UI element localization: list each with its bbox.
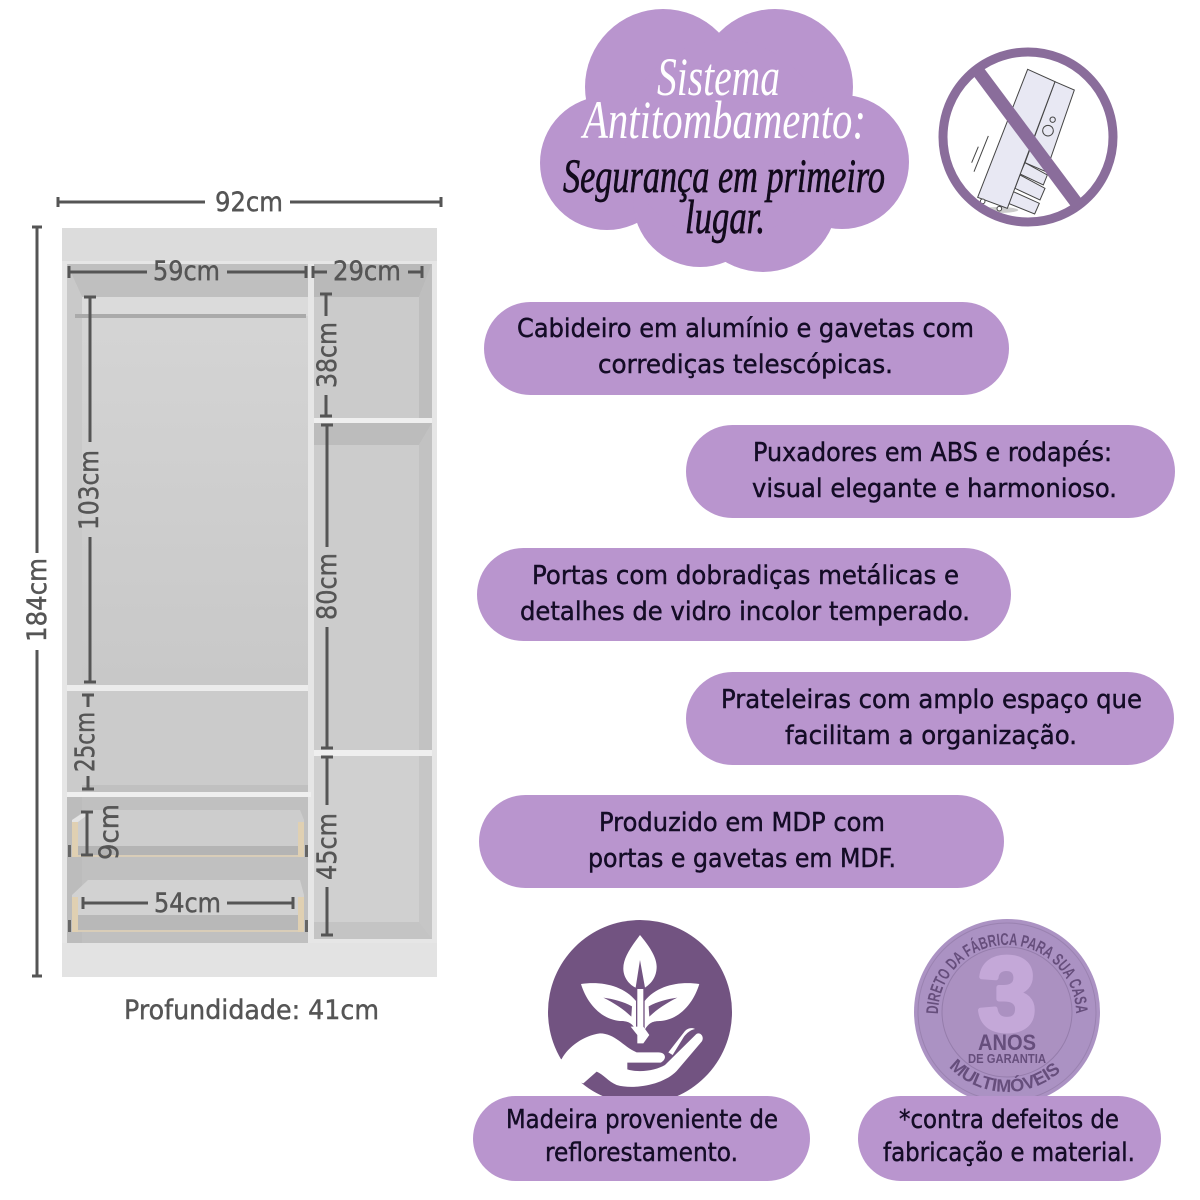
warranty seal: 3	[978, 937, 1036, 1053]
dimension: 59cm: 59cm	[153, 256, 220, 287]
dimension: 54cm	[83, 888, 293, 919]
icon: plant in hand	[543, 920, 732, 1104]
feature pill: cabideiro: Cabideiro em alumínio e gavetas com	[517, 314, 974, 344]
feature pill: MDP: Produzido em MDP com	[599, 808, 885, 838]
dimension: 80cm: 80cm	[312, 553, 343, 620]
warranty seal: DIRETO DA FÁBRICA PARA SUA CASA	[926, 933, 1088, 1014]
dimension: width 92cm	[58, 187, 441, 218]
feature pill: portas: Portas com dobradiças metálicas e	[532, 561, 959, 591]
dimension: 9cm: 9cm	[94, 804, 125, 860]
feature pill: reflorestamento: Madeira proveniente de	[506, 1105, 778, 1135]
feature pill: puxadores	[686, 425, 1175, 518]
feature pill: cabideiro	[484, 302, 1009, 395]
feature pill: cabideiro: corrediças telescópicas.	[598, 350, 893, 380]
feature pill: puxadores: Puxadores em ABS e rodapés:	[753, 438, 1112, 468]
wardrobe diagram	[62, 228, 437, 977]
cloud heading: Sistema	[657, 47, 780, 107]
dimension: height 184cm: 184cm	[22, 558, 53, 642]
feature pill: garantia	[858, 1096, 1161, 1181]
dimension: height 184cm	[22, 227, 53, 976]
dimension: 29cm	[313, 256, 422, 287]
cloud heading	[540, 9, 909, 272]
dimension: 59cm	[69, 256, 306, 287]
feature pill: garantia: fabricação e material.	[883, 1138, 1135, 1168]
feature pill: portas: detalhes de vidro incolor temperado.	[520, 597, 970, 627]
left shelf compartment	[67, 685, 311, 797]
feature pill: reflorestamento: reflorestamento.	[545, 1138, 738, 1168]
dimension: 103cm: 103cm	[74, 450, 105, 530]
depth label: Profundidade: 41cm	[124, 995, 379, 1026]
dimension: 45cm: 45cm	[312, 813, 343, 880]
cloud heading: lugar.	[685, 191, 765, 244]
drawers	[67, 797, 308, 943]
dimension: 25cm: 25cm	[70, 712, 101, 772]
warranty seal: DE GARANTIA	[968, 1051, 1047, 1066]
feature pill: garantia: *contra defeitos de	[899, 1105, 1119, 1135]
feature pill: portas	[477, 548, 1011, 641]
dimension: 54cm: 54cm	[154, 888, 221, 919]
dimension: 45cm	[312, 757, 343, 935]
warranty seal	[914, 919, 1100, 1096]
right compartments	[314, 264, 432, 939]
dimension: 103cm	[74, 297, 105, 682]
feature pill: prateleiras: facilitam a organização.	[785, 721, 1077, 751]
dimension: 80cm	[312, 425, 343, 748]
feature pill: MDP	[479, 795, 1004, 888]
feature pill: reflorestamento	[473, 1096, 810, 1181]
dimension: 9cm	[81, 804, 125, 860]
left hanging compartment	[67, 264, 308, 685]
feature pill: prateleiras	[686, 672, 1174, 765]
feature pill: prateleiras: Prateleiras com amplo espaço que	[721, 685, 1142, 715]
warranty seal: MULTIMÓVEIS	[950, 1058, 1060, 1092]
dimension: 38cm	[312, 294, 343, 416]
icon: no tipping prohibition sign	[943, 52, 1113, 222]
feature pill: puxadores: visual elegante e harmonioso.	[752, 474, 1117, 504]
warranty seal: ANOS	[978, 1030, 1036, 1055]
cloud heading: Segurança em primeiro	[563, 150, 885, 203]
feature pill: MDP: portas e gavetas em MDF.	[588, 844, 896, 874]
cloud heading: Antitombamento:	[581, 90, 866, 150]
dimension: width 92cm: 92cm	[215, 187, 283, 218]
dimension: 38cm: 38cm	[312, 322, 343, 388]
dimension: 29cm: 29cm	[333, 256, 401, 287]
